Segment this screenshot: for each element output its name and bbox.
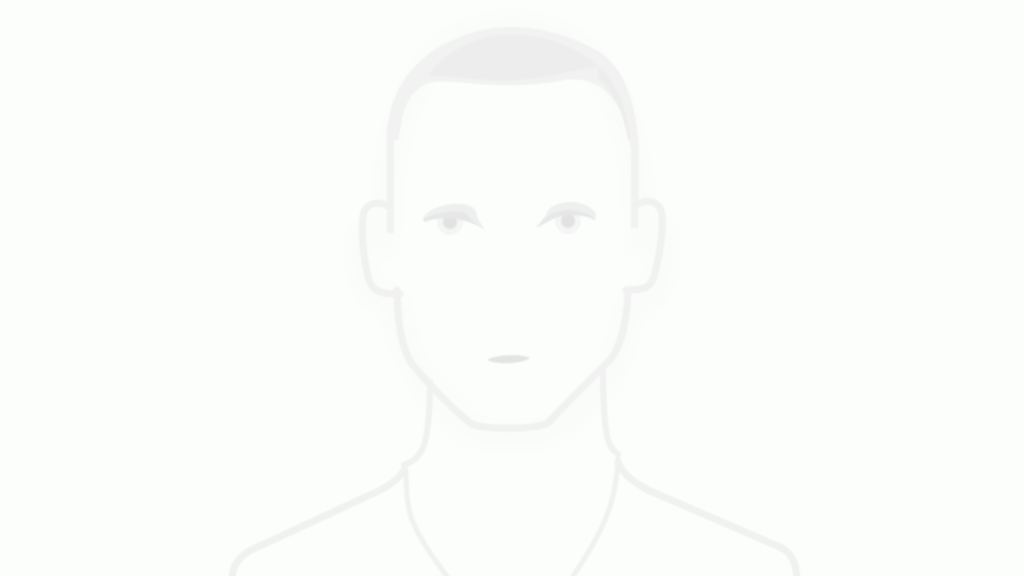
icon: mouth [487, 355, 530, 363]
figure [232, 27, 797, 576]
collar left [406, 470, 448, 576]
icon: right eye [536, 202, 596, 234]
left shoulder [232, 470, 404, 576]
soft halo around head [359, 25, 666, 435]
right shoulder [618, 462, 797, 576]
icon: left ear [362, 203, 400, 294]
icon: left eye [423, 204, 485, 235]
icon: right ear [626, 201, 662, 290]
neck right [603, 373, 618, 454]
collar right [572, 458, 618, 576]
face outline [397, 290, 628, 428]
icon: hair [387, 27, 639, 233]
neck left [404, 382, 430, 465]
